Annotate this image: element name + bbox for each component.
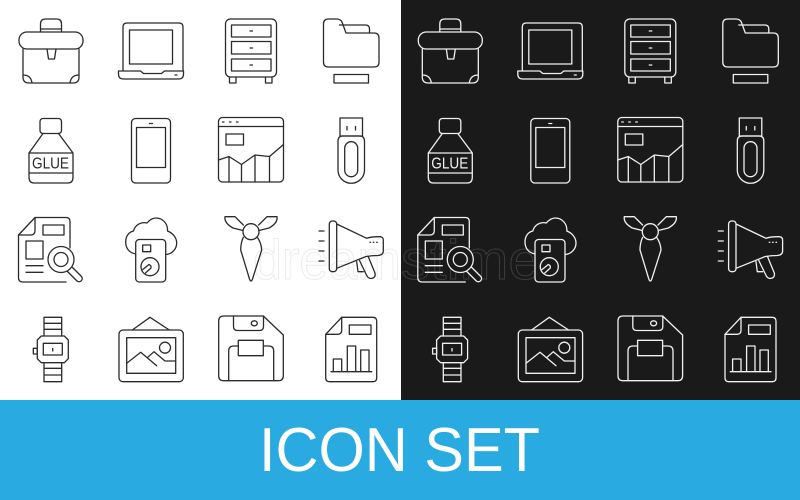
icon: document search bbox=[418, 218, 482, 282]
icon: smartphone bbox=[531, 118, 570, 183]
icon: usb flash drive bbox=[338, 118, 364, 183]
icon: glue bottle: GLUE bbox=[431, 156, 468, 172]
icon: document search bbox=[18, 218, 82, 282]
icon: browser analytics bbox=[218, 118, 284, 182]
icon: briefcase bbox=[418, 19, 482, 83]
icon: megaphone bbox=[319, 221, 383, 278]
icon: laptop bbox=[518, 23, 583, 79]
icon: floppy disk bbox=[219, 316, 283, 381]
icon: filing cabinet bbox=[226, 19, 276, 83]
icon: neck scarf bbox=[624, 217, 676, 281]
icon: smartphone bbox=[132, 118, 170, 183]
icon: glue bottle bbox=[428, 118, 472, 183]
icon: chart document bbox=[725, 317, 776, 382]
icon: briefcase bbox=[19, 19, 83, 83]
icons: dark panel bbox=[418, 19, 783, 382]
icon: filing cabinet bbox=[625, 19, 676, 83]
icon: wristwatch bbox=[33, 317, 68, 382]
icon: laptop bbox=[118, 23, 184, 79]
banner bbox=[0, 400, 800, 500]
icon: usb flash drive bbox=[737, 118, 764, 183]
panel: dark background bbox=[401, 0, 800, 400]
icon: framed picture bbox=[518, 317, 583, 382]
icon: glue bottle bbox=[29, 118, 73, 183]
icon: wristwatch bbox=[433, 317, 468, 382]
icon: floppy disk bbox=[618, 316, 683, 381]
panel: white background bbox=[0, 0, 401, 400]
icon: cloud hard drive bbox=[525, 218, 576, 282]
icon: framed picture bbox=[119, 317, 183, 382]
watermark on white: dream bbox=[253, 228, 401, 291]
icon: folder bbox=[723, 19, 778, 83]
icon: chart document bbox=[326, 317, 377, 382]
icon: megaphone bbox=[718, 221, 783, 278]
icon: browser analytics bbox=[618, 118, 683, 182]
icon: cloud hard drive bbox=[126, 218, 177, 282]
icon: glue bottle: GLUE bbox=[32, 156, 69, 172]
title: ICON SET bbox=[259, 416, 540, 485]
watermark on dark: stime bbox=[401, 228, 541, 291]
icons: light panel bbox=[18, 19, 383, 382]
icon: folder bbox=[324, 19, 379, 83]
icon: neck scarf bbox=[225, 217, 277, 281]
